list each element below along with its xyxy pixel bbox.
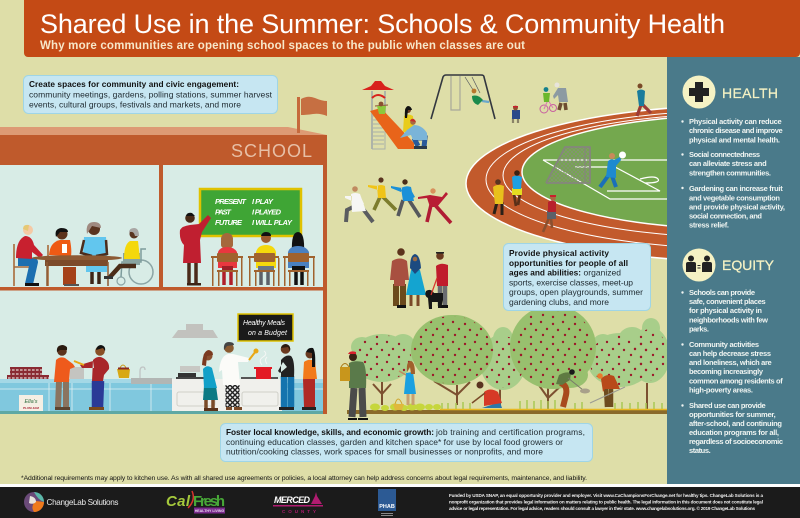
person: man with basket <box>340 351 368 420</box>
logo: Merced County <box>273 492 323 514</box>
equity bullets: parks. <box>689 324 709 334</box>
person: child on bike with grandfather <box>540 82 568 113</box>
sign: healthy meals on a budget <box>238 314 293 341</box>
equity bullets <box>681 288 783 455</box>
person: student one <box>218 233 237 285</box>
callout: physical activity: sports, exercise classes, meet-up <box>509 277 633 287</box>
health bullets: strengthen communities. <box>689 168 771 178</box>
running track and soccer field <box>465 84 667 260</box>
person: blue dress woman <box>81 222 107 284</box>
orchard trees <box>351 305 670 410</box>
stove pans <box>178 366 200 377</box>
person: white coat <box>345 186 373 222</box>
meeting table <box>32 255 122 286</box>
subtitle: Why more communities are opening school spaces to the public when classes are out <box>40 40 525 52</box>
person: student three <box>288 232 309 285</box>
health bullets: Social connectedness <box>689 150 760 159</box>
family with dog <box>390 248 448 309</box>
person: woman in teal skirt <box>202 350 218 411</box>
chalkboard: PAST <box>215 208 232 216</box>
person: red outfit <box>418 188 451 223</box>
faucet <box>140 367 145 378</box>
callout: knowledge and economic growth: continuing education classes, garden and kitchen space* for use by local food growers or <box>226 437 563 447</box>
school label: SCHOOL <box>231 141 312 161</box>
callout: community and civic engagement: Create spaces for community and civic engagement: <box>29 79 239 89</box>
sign: healthy meals on a budget: on a Budget <box>248 330 288 337</box>
classroom people <box>180 213 315 286</box>
person: orange shirt woman <box>302 348 317 410</box>
person: child on slide <box>375 102 388 114</box>
health bullets: social connection, and <box>689 212 762 220</box>
person: teacher <box>180 213 211 286</box>
room: meeting room <box>0 165 159 287</box>
person: girl in blue dress <box>399 361 416 405</box>
meeting room people <box>14 222 153 286</box>
health bullets: and provide physical activity, <box>689 202 785 212</box>
logo: CalFresh: HEALTHY LIVING <box>195 509 225 513</box>
flag <box>297 97 327 133</box>
callout: physical activity: groups, open playgrounds, summer <box>509 287 643 297</box>
gray pot <box>70 367 84 379</box>
callout: physical activity <box>504 244 650 310</box>
slide <box>370 108 414 149</box>
room: classroom <box>163 165 323 287</box>
equity bullets: Community activities <box>689 340 759 349</box>
footer bar <box>0 484 800 518</box>
callout: physical activity: Provide physical activity <box>509 248 609 258</box>
title: Shared Use in the Summer: Schools & Community Health <box>40 9 725 39</box>
person: woman in hijab <box>406 254 426 306</box>
person: student two <box>256 232 276 285</box>
stoves <box>172 379 282 411</box>
footnote: *Additional requirements may apply to kitchen use. As with all shared use agreements or policies, a local attorney can help address concerns about legal requirements, maintenance, and liability. <box>21 475 587 482</box>
health bullets: physical and mental health. <box>689 136 780 144</box>
person: man with shovel <box>556 369 590 407</box>
jam box: PLUM JAM <box>23 406 39 410</box>
equity bullets: high-poverty areas. <box>689 386 753 394</box>
jam box: Ella's <box>25 399 38 405</box>
person: kneeling man <box>400 119 427 149</box>
funding statement: nonprofit organization that provides legal information on matters relating to public health. The legal information in this document does not constitute legal <box>449 500 763 504</box>
logo: ChangeLab Solutions: ChangeLab Solutions <box>46 498 118 507</box>
equity bullets: for physical activity in <box>689 306 762 315</box>
person: red shirt with spoon <box>74 345 109 410</box>
person: man with dog leash <box>436 252 448 308</box>
person: yellow shirt <box>368 177 396 210</box>
red pot with steam <box>254 351 272 379</box>
floor <box>0 411 323 414</box>
yellow bucket <box>117 365 130 378</box>
funding statement: advice or legal representation. For legal advice, readers should consult a lawyer in their state. www.changelabsolutions.org. © 2019 ChangeLab Solutions <box>449 505 755 511</box>
funding statement: Funded by USDA SNAP, an equal opportunity provider and employer. Visit www.CaChampionsForChange.net for healthy tips. ChangeLab Solutions is a <box>449 493 763 498</box>
person: yellow shirt runner <box>493 179 504 215</box>
roof <box>0 127 327 135</box>
callout: community and civic engagement <box>24 76 278 114</box>
logo: Merced County: MERCED <box>274 495 310 505</box>
equity bullets: safe, convenient places <box>689 297 766 306</box>
callout: knowledge and economic growth: Foster local knowledge, skills, and economic growth: <box>226 427 434 437</box>
equity bullets: regardless of socioeconomic <box>689 437 783 446</box>
room: kitchen <box>0 290 323 412</box>
sink counter <box>131 378 172 384</box>
callout: community and civic engagement: community meetings, gardens, polling stations, summer harvest <box>29 89 273 99</box>
person: blue shirt <box>391 179 420 217</box>
callout: knowledge and economic growth <box>220 424 592 462</box>
equity bullets: after-school, and continuing <box>689 419 782 428</box>
equity bullets: Schools can provide <box>689 288 755 297</box>
side panel <box>667 57 800 484</box>
callout: physical activity: organized <box>584 268 621 278</box>
callout: community and civic engagement: events, cultural groups, festivals and markets, and more <box>29 99 241 109</box>
logo: CalFresh <box>166 491 225 514</box>
garden ground <box>347 410 667 414</box>
dog <box>425 278 443 309</box>
range hood <box>172 324 218 338</box>
person: man with hoe <box>590 373 625 407</box>
health bullets: can alleviate stress and <box>689 159 767 168</box>
health bullets: Physical activity can reduce <box>689 117 782 126</box>
kitchen counters <box>0 324 323 414</box>
logo: CalFresh: Cal <box>166 493 191 510</box>
field lines <box>543 160 667 199</box>
swing set <box>431 75 495 119</box>
icon: health cross <box>682 76 716 108</box>
equity bullets: can help decrease stress <box>689 349 771 358</box>
health bullets: stress relief. <box>689 220 729 230</box>
person: orange shirt <box>54 345 75 410</box>
title banner <box>24 0 800 57</box>
callout: knowledge and economic growth: nutrition/cooking classes, work spaces for small businesses or nonprofits, and more <box>226 446 543 456</box>
equity bullets: becoming increasingly <box>689 367 764 376</box>
heading: health: HEALTH <box>722 85 778 101</box>
slide tower <box>362 81 394 149</box>
person: toddler <box>512 106 520 123</box>
person: chef <box>219 342 258 410</box>
school building <box>0 97 327 414</box>
student desks and chairs <box>211 253 315 286</box>
logo: PHAB: PHAB <box>379 504 395 510</box>
person: black shirt <box>278 344 294 410</box>
callout: knowledge and economic growth: job training and certification programs, <box>435 427 585 437</box>
callout: physical activity: gardening clubs, and more <box>509 297 609 307</box>
person: woman in yellow <box>403 106 414 132</box>
person: woman in wheelchair <box>104 228 153 285</box>
soccer goal <box>546 147 590 183</box>
orchard garden <box>340 305 670 420</box>
chalkboard <box>200 189 301 236</box>
vegetable rows <box>440 400 667 410</box>
equity bullets: opportunities for summer, <box>689 410 776 419</box>
playground <box>362 75 568 149</box>
soccer ball <box>619 152 626 158</box>
chalkboard: PRESENT <box>215 197 247 206</box>
jam box <box>19 395 43 411</box>
funding statement <box>449 493 763 511</box>
equity bullets: status. <box>689 446 711 455</box>
logo: ChangeLab Solutions <box>24 492 118 512</box>
logo: Merced County: COUNTY <box>282 509 316 514</box>
person: orange top woman <box>48 228 79 286</box>
person: red cap runner <box>543 195 556 232</box>
icon: equity people <box>682 248 716 282</box>
chalkboard: I PLAYED <box>252 208 282 216</box>
cabbage row <box>370 404 441 411</box>
equity bullets: and loneliness, which are <box>689 358 772 367</box>
tai chi group <box>345 177 451 223</box>
callout: physical activity: ages and abilities: <box>509 268 581 278</box>
health bullets: and vegetable consumption <box>689 194 780 202</box>
heading: equity: EQUITY <box>722 257 775 273</box>
person: kneeling gardener <box>472 382 502 408</box>
person: goalkeeper <box>600 152 626 187</box>
person: blue shirt runner <box>512 170 522 206</box>
equity bullets: Shared use can provide <box>689 401 766 410</box>
school wall <box>0 135 327 165</box>
basket <box>393 399 404 410</box>
chalkboard: I PLAY <box>252 197 274 206</box>
equity bullets: education programs for all, <box>689 428 779 437</box>
health bullets: Gardening can increase fruit <box>689 184 783 193</box>
callout: physical activity: opportunities for people of all <box>509 258 628 268</box>
logo: PHAB <box>378 489 396 516</box>
health bullets: chronic disease and improve <box>689 126 783 135</box>
person: red sweater man <box>14 225 43 286</box>
sign: healthy meals on a budget: Healthy Meals <box>243 320 286 327</box>
health bullets <box>681 117 785 230</box>
equity bullets: neighborhoods with few <box>689 316 768 324</box>
person: man in brown jacket <box>390 248 409 308</box>
chalkboard: I WILL PLAY <box>252 218 293 227</box>
logo: CalFresh: Fresh <box>193 493 225 510</box>
stacked jam jars <box>7 367 49 379</box>
equity bullets: common among residents of <box>689 376 783 386</box>
kitchen people <box>54 342 317 411</box>
person: woman jogging on track <box>637 84 651 116</box>
person: child on swing <box>472 89 489 105</box>
floor divider <box>0 287 327 290</box>
chalkboard: FUTURE <box>215 218 243 227</box>
